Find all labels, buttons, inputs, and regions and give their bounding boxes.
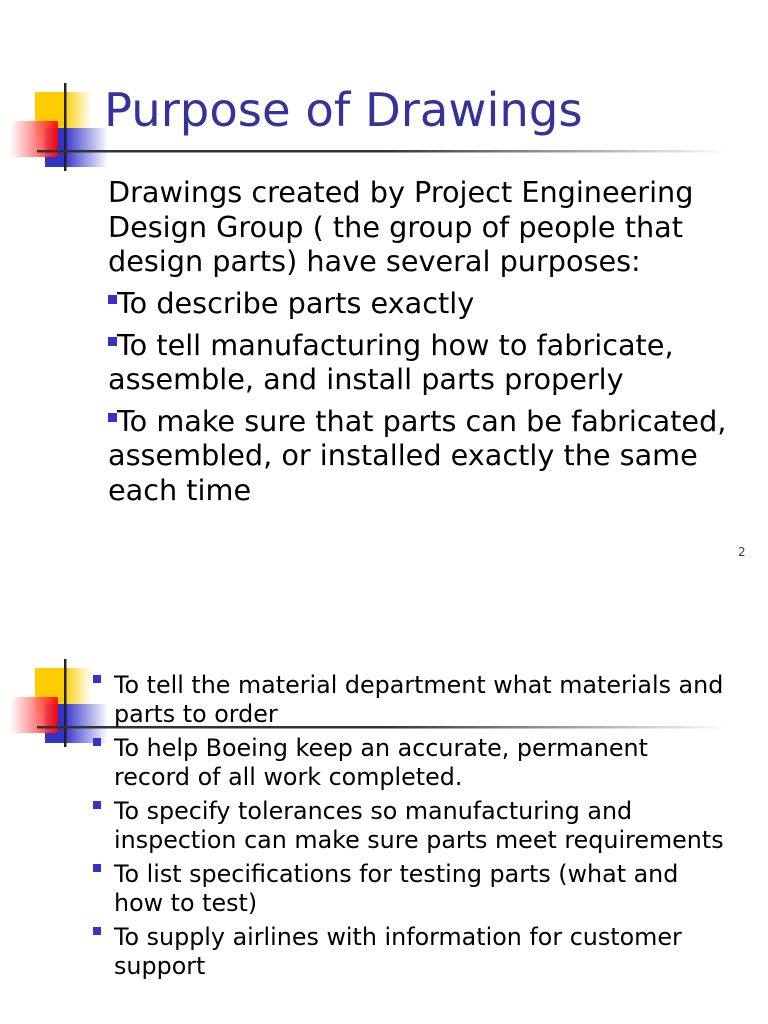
- logo: slide 2: [12, 659, 716, 747]
- bullet list slide 2: To help Boeing keep an accurate, permanent: [114, 734, 648, 762]
- bullet list slide 2: To specify tolerances so manufacturing and inspection can make sure parts meet requirements: [114, 797, 724, 854]
- title: Purpose of Drawings: [104, 83, 583, 137]
- bullet list slide 1: To tell manufacturing how to fabricate, assemble, and install parts properly: [108, 328, 674, 396]
- page number: 2: [738, 545, 746, 559]
- bullet list slide 1: [108, 286, 726, 506]
- intro text: Drawings created by Project Engineering Design Group ( the group of people that design parts) have several purposes:: [108, 175, 693, 278]
- bullet list slide 1: To make sure that parts can be fabricated, assembled, or installed exactly the same each time: [108, 404, 726, 506]
- bullet list slide 2: To supply airlines with information for customer support: [114, 923, 682, 980]
- logo: slide 1: [12, 83, 716, 171]
- bullet list slide 2: To tell the material department what materials and parts to order: [114, 671, 723, 728]
- bullet list slide 2: record of all work completed.: [114, 763, 462, 791]
- bullet list slide 2: [93, 671, 724, 980]
- bullet list slide 2: how to test): [114, 889, 257, 917]
- bullet list slide 2: To list specifications for testing parts (what and: [114, 860, 678, 888]
- bullet list slide 1: To describe parts exactly: [117, 286, 474, 320]
